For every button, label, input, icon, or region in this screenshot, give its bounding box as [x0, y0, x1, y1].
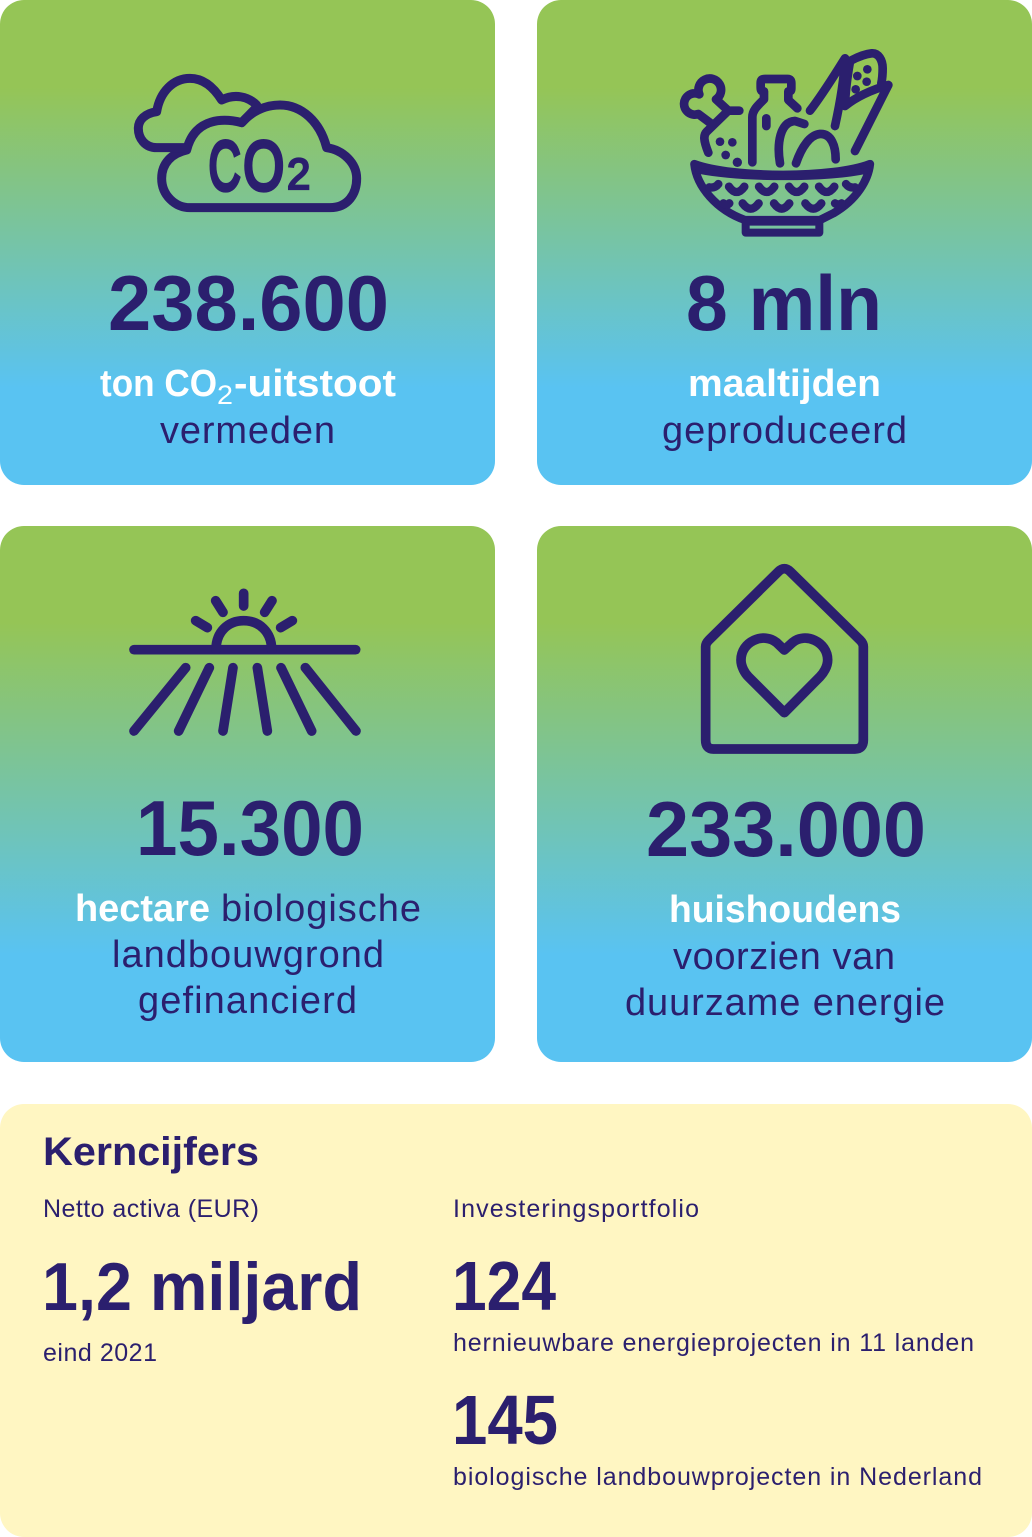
panel: CO2 avoided	[0, 0, 495, 485]
label: ton CO2-uitstoot: ton CO	[100, 363, 217, 405]
panel: key figures	[0, 1104, 1032, 1537]
statistic: 233.000: 233.000	[646, 785, 926, 873]
label: ton CO2-uitstoot: 2	[217, 380, 233, 410]
statistic: 124: 124	[452, 1247, 556, 1325]
label: eind 2021: eind 2021	[43, 1339, 157, 1367]
label: renewable energy projects: hernieuwbare energieprojecten in 11 landen	[453, 1329, 974, 1357]
icon: food bowl	[684, 53, 888, 233]
label: organic farming projects: biologische landbouwprojecten in Nederland	[453, 1463, 982, 1491]
label: geproduceerd: geproduceerd	[662, 410, 907, 452]
panel: households with sustainable energy	[537, 526, 1032, 1062]
label: huishoudens: huishoudens	[669, 889, 901, 931]
label: ton CO2-uitstoot: -uitstoot	[234, 363, 396, 405]
heading: Kerncijfers: Kerncijfers	[43, 1130, 259, 1174]
icon: CO2 clouds: 2	[287, 151, 310, 199]
label: vermeden: vermeden	[160, 410, 335, 452]
icon: house with heart	[706, 569, 863, 749]
label: hectare biologische: biologische	[221, 888, 421, 930]
icon: CO2 clouds: C	[209, 127, 241, 205]
label: duurzame energie: duurzame energie	[625, 982, 945, 1024]
panel: organic farmland financed	[0, 526, 495, 1062]
label: landbouwgrond: landbouwgrond	[112, 934, 384, 976]
statistic: 145: 145	[452, 1381, 558, 1459]
label: voorzien van: voorzien van	[673, 936, 895, 978]
label: gefinancierd: gefinancierd	[138, 980, 357, 1022]
label: Investeringsportfolio: Investeringsportfolio	[453, 1195, 699, 1223]
label: Netto activa: Netto activa (EUR)	[43, 1195, 259, 1223]
icon: CO2 clouds	[138, 78, 357, 208]
icon: sun over field	[134, 593, 356, 731]
label: hectare biologische: hectare	[75, 888, 210, 930]
statistic: 15.300: 15.300	[136, 784, 364, 872]
label: ton CO2-uitstoot	[100, 363, 396, 410]
statistic: 238.600: 238.600	[108, 259, 389, 347]
statistic: 8 mln: 8 mln	[686, 259, 882, 347]
icon: CO2 clouds: O	[243, 127, 284, 205]
statistic: 1,2 miljard: 1,2 miljard	[42, 1249, 362, 1325]
label: hectare biologische	[75, 888, 421, 930]
panel: meals produced	[537, 0, 1032, 485]
label: maaltijden: maaltijden	[688, 363, 881, 405]
